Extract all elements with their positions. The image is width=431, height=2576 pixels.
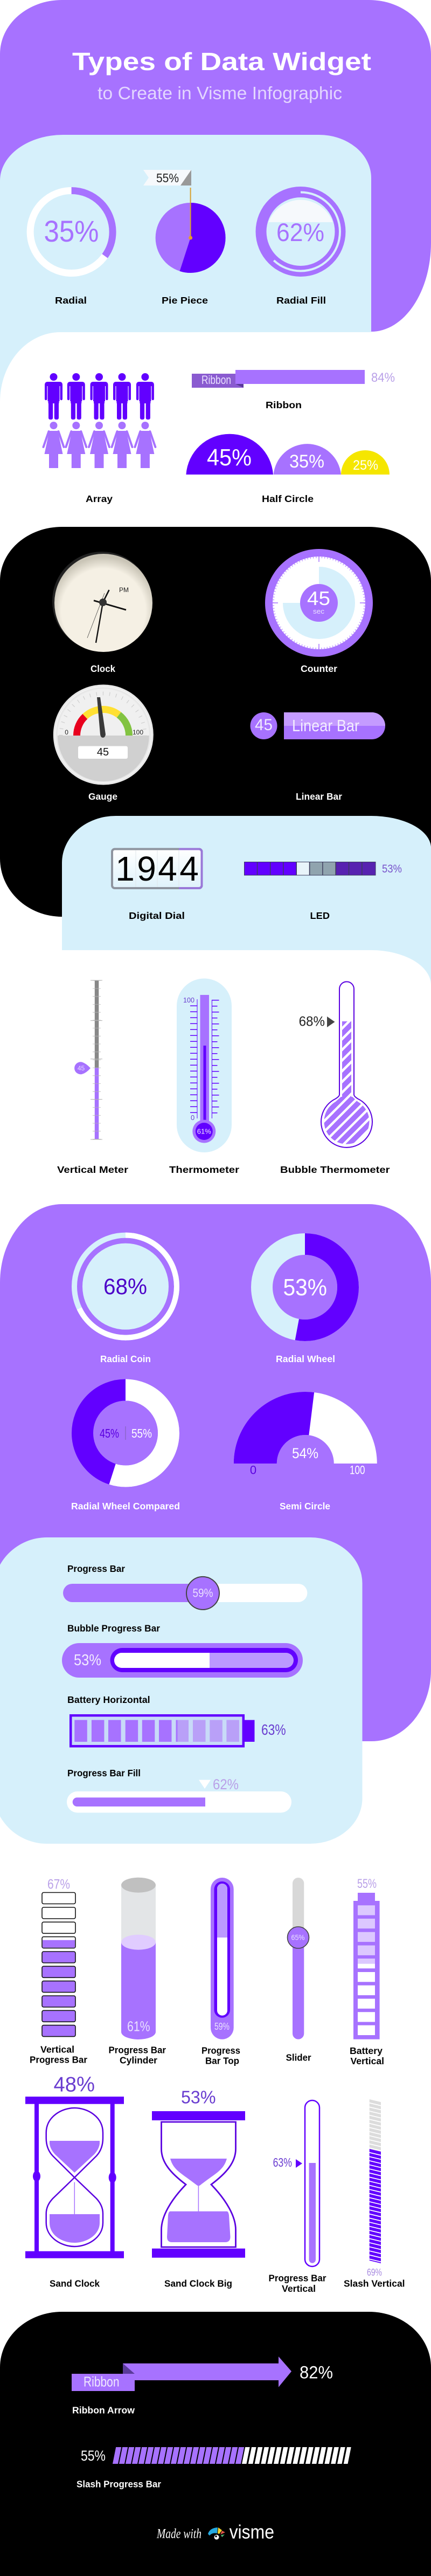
progress bar fill widget [67, 1776, 291, 1813]
gauge widget: 45 [97, 746, 109, 758]
ribbon widget: Ribbon [201, 373, 231, 387]
progress bar widget: 59% [193, 1586, 213, 1599]
radial fill widget: 62% [276, 218, 324, 246]
thermometer widget: 100 [183, 996, 194, 1004]
half circle widget: 25% [353, 458, 378, 473]
sand clock widget [25, 2073, 124, 2258]
clock widget [52, 552, 152, 652]
footer: made with visme [156, 2521, 274, 2543]
label: LED: LED [310, 910, 330, 921]
label: clock: Clock [91, 663, 115, 674]
sand clock widget: 48% [54, 2073, 95, 2097]
label: bubble thermometer: Bubble Thermometer [280, 1164, 390, 1175]
LED widget: 53% [382, 863, 402, 875]
subtitle: to Create in Visme Infographic [98, 83, 342, 103]
LED widget [244, 862, 402, 876]
radial fill widget [255, 187, 346, 277]
label: progress bar top [201, 2045, 240, 2066]
semi circle widget: 100 [350, 1464, 365, 1477]
slash vertical widget: 69% [367, 2267, 382, 2278]
thermometer widget: 61% [197, 1127, 211, 1136]
gauge widget: 0 [65, 729, 68, 736]
bubble thermometer widget [299, 981, 373, 1154]
digital dial widget: 4 [158, 849, 177, 888]
label: progress bar vertical: Progress Bar [268, 2273, 326, 2284]
ribbon arrow widget [72, 2357, 333, 2391]
radial wheel widget [262, 1244, 348, 1330]
radial wheel compared widget: 55% [131, 1426, 152, 1440]
label: progress bar: Progress Bar [67, 1563, 125, 1574]
label: battery vertical [350, 2045, 384, 2066]
label: vertical progress bar [30, 2044, 87, 2065]
linear bar widget [250, 712, 385, 739]
progress bar top widget: 59% [214, 2021, 230, 2032]
progress bar cylinder widget: 61% [127, 2018, 150, 2035]
bubble progress bar widget: 53% [74, 1652, 101, 1669]
label: sand clock big: Sand Clock Big [164, 2278, 232, 2289]
footer: made with visme: Made with [156, 2527, 201, 2541]
label: vertical progress bar: Progress Bar [30, 2055, 87, 2065]
battery vertical widget [353, 1877, 380, 2039]
radial widget: 35% [44, 214, 99, 248]
label: gauge: Gauge [88, 791, 117, 802]
label: array: Array [86, 493, 113, 504]
icon: visme logo [208, 2527, 225, 2540]
ribbon widget [192, 370, 395, 388]
radial wheel compared widget [82, 1390, 169, 1476]
label: vertical meter: Vertical Meter [57, 1164, 128, 1175]
panel: header [0, 0, 431, 332]
counter widget: sec [313, 607, 325, 615]
digital dial widget: 1 [115, 849, 135, 888]
pie piece widget: 55% [156, 171, 179, 185]
ribbon arrow widget: 82% [300, 2363, 333, 2382]
semi circle widget: 54% [292, 1445, 318, 1461]
thermometer widget [177, 978, 232, 1152]
label: sand clock: Sand Clock [50, 2278, 100, 2289]
bubble thermometer widget: 68% [299, 1014, 325, 1029]
panel: progress bars [0, 1537, 362, 1844]
label: ribbon: Ribbon [266, 400, 302, 410]
vertical progress bar widget: 67% [47, 1877, 70, 1892]
label: pie piece: Pie Piece [162, 295, 208, 306]
label: battery vertical: Vertical [350, 2056, 384, 2066]
label: bubble progress bar: Bubble Progress Bar [67, 1623, 160, 1634]
panel: meters and thermometers [57, 950, 431, 1173]
radial widget [30, 191, 113, 273]
counter widget [265, 549, 373, 657]
label: battery horizontal: Battery Horizontal [67, 1694, 150, 1705]
label: semi circle: Semi Circle [280, 1501, 330, 1512]
footer: made with visme: visme [230, 2521, 274, 2543]
label: ribbon arrow: Ribbon Arrow [72, 2405, 135, 2416]
label: progress bar cylinder [109, 2045, 166, 2066]
label: progress bar cylinder: Cylinder [120, 2055, 157, 2066]
label: slash progress bar: Slash Progress Bar [77, 2479, 161, 2490]
semi circle widget: 0 [250, 1464, 256, 1477]
sand clock big widget [152, 2087, 245, 2258]
panel: radial widgets [0, 135, 371, 415]
label: radial wheel: Radial Wheel [276, 1354, 335, 1364]
label: vertical progress bar: Vertical [40, 2044, 74, 2055]
panel: ribbon arrow and slash bar [0, 2312, 431, 2576]
label: linear bar: Linear Bar [296, 791, 342, 802]
label: progress bar vertical: Vertical [282, 2283, 316, 2294]
bubble progress bar widget [62, 1643, 303, 1678]
vertical progress bar widget [42, 1877, 75, 2037]
half circle widget [186, 434, 390, 475]
label: radial: Radial [55, 295, 87, 306]
panel: radial coin, wheel and semi circle [0, 1204, 431, 1741]
digital dial widget: 9 [137, 849, 156, 888]
progress bar fill widget: 62% [213, 1776, 239, 1792]
label: thermometer: Thermometer [169, 1164, 239, 1175]
radial coin widget: 68% [103, 1274, 147, 1299]
label: progress bar top: Bar Top [205, 2056, 239, 2066]
vertical meter widget: 45 [78, 1064, 85, 1072]
label: digital dial: Digital Dial [129, 910, 185, 921]
title: Types of Data Widget [72, 47, 371, 75]
slash progress bar widget: 55% [81, 2448, 106, 2464]
label: progress bar top: Progress [201, 2045, 240, 2056]
label: half circle: Half Circle [262, 493, 314, 504]
progress bar widget [63, 1577, 307, 1610]
progress bar top widget [211, 1878, 234, 2039]
label: progress bar cylinder: Progress Bar [109, 2045, 166, 2056]
progress bar vertical widget: 63% [273, 2155, 292, 2169]
radial wheel compared widget: 45% [100, 1426, 119, 1440]
clock widget: PM [119, 586, 129, 594]
ribbon widget: 84% [371, 370, 395, 385]
battery vertical widget: 55% [357, 1877, 377, 1891]
ribbon arrow widget: Ribbon [84, 2374, 120, 2390]
label: radial fill: Radial Fill [276, 295, 326, 306]
linear bar widget: Linear Bar [292, 716, 359, 735]
slider widget [288, 1878, 309, 2039]
progress bar cylinder widget [121, 1878, 156, 2039]
label: progress bar vertical [268, 2273, 326, 2294]
semi circle widget [250, 1413, 365, 1477]
battery horizontal widget: 63% [261, 1721, 286, 1738]
panel: clock, counter, gauge, linear bar [0, 527, 431, 917]
radial wheel widget: 53% [283, 1274, 327, 1301]
label: slider: Slider [286, 2052, 311, 2063]
slider widget: 65% [291, 1933, 305, 1942]
digital dial widget: 4 [179, 849, 199, 888]
battery horizontal widget [71, 1715, 286, 1746]
panel: array and ribbon [0, 332, 431, 527]
radial coin widget [74, 1235, 177, 1338]
sand clock big widget: 53% [181, 2087, 215, 2107]
linear bar widget: 45 [255, 716, 273, 734]
label: radial coin: Radial Coin [100, 1354, 151, 1364]
label: counter: Counter [301, 663, 337, 674]
gauge widget [53, 685, 154, 785]
half circle widget: 35% [289, 451, 324, 472]
counter widget: 45 [307, 587, 330, 609]
label: radial wheel compared: Radial Wheel Compared [71, 1501, 180, 1512]
progress bar vertical widget [273, 2100, 319, 2266]
panel: digital dial and LED [62, 816, 431, 987]
vertical meter widget [74, 980, 102, 1139]
digital dial widget [112, 849, 201, 888]
label: progress bar fill: Progress Bar Fill [67, 1768, 141, 1778]
array pictogram [43, 373, 155, 468]
label: slash vertical: Slash Vertical [344, 2278, 405, 2289]
thermometer widget: 0 [191, 1114, 194, 1122]
label: battery vertical: Battery [350, 2045, 383, 2056]
pie piece widget [143, 170, 226, 273]
half circle widget: 45% [207, 444, 252, 471]
gauge widget: 100 [133, 729, 143, 736]
